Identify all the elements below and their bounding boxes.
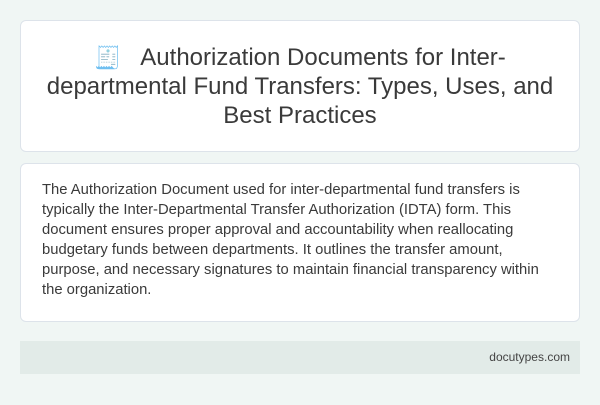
panel: description card <box>20 163 580 322</box>
panel: title card <box>20 20 580 152</box>
title: 🧾 Authorization Documents for Inter-departmental Fund Transfers: Types, Uses, and Best Practices <box>47 44 553 129</box>
text block: description: The Authorization Document used for inter-departmental fund transfers is typically the Inter-Departmental Transfer Authorization (IDTA) form. This document ensures proper approval and accountability when reallocating budgetary funds between departments. It outlines the transfer amount, purpose, and necessary signatures to maintain financial transparency within the organization. <box>42 182 539 298</box>
footer: docutypes.com <box>489 350 570 364</box>
footer <box>20 341 580 374</box>
